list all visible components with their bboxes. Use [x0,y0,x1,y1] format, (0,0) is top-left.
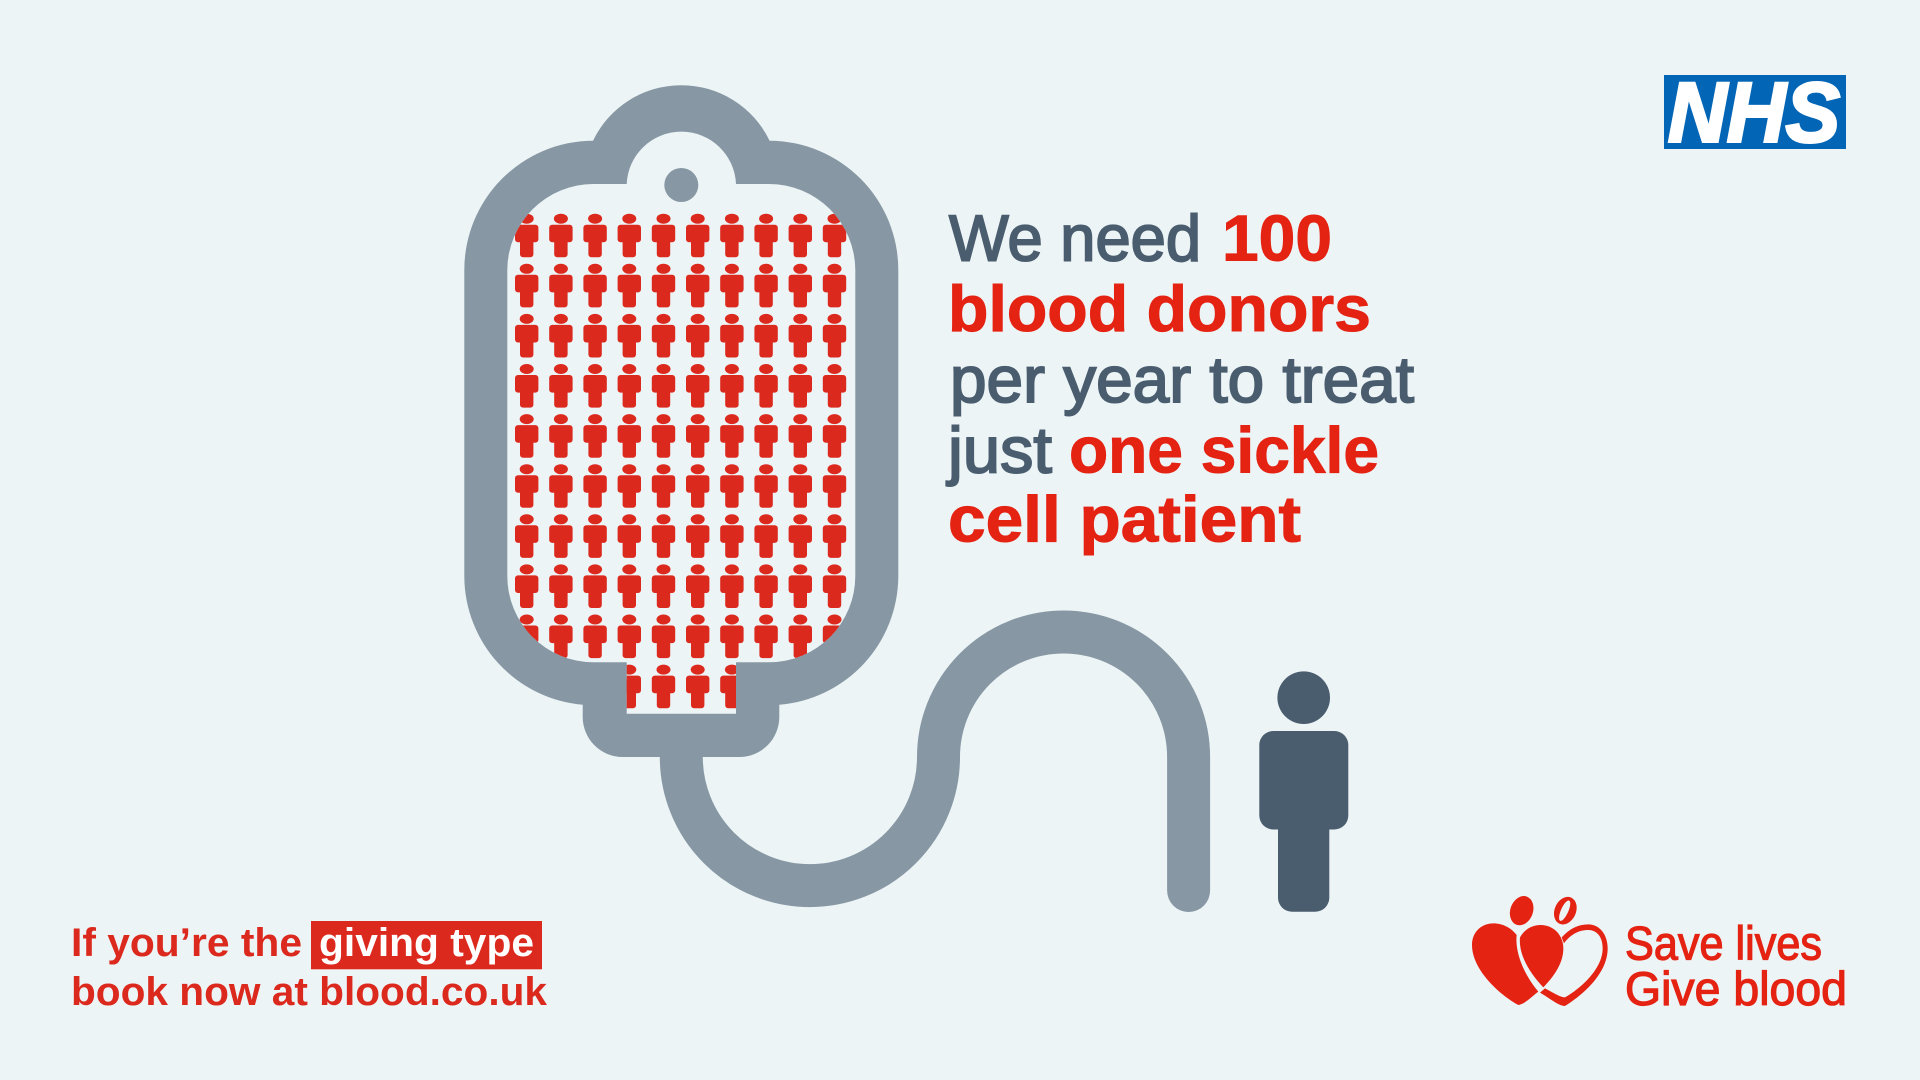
logo: Save lives Give blood [1472,893,1847,1015]
headline text: We need [949,202,1201,275]
blood bag with tube [464,85,1189,890]
headline text: cell patient [948,483,1301,556]
icon: patient figure [1259,671,1348,912]
headline text: just [946,414,1052,487]
pictogram: 100 red donors inside the bag [515,214,846,708]
bag outline [464,85,898,757]
call to action: book now at blood.co.uk [71,970,548,1014]
bag hanging hole [664,168,698,202]
call to action [71,921,548,1014]
call to action: If you’re the [71,921,302,965]
headline text: per year to treat [950,343,1414,416]
logo: NHS: NHS [1668,66,1840,160]
headline text: one sickle [1069,414,1379,487]
icon: hearts [1472,893,1608,1006]
headline text: blood donors [948,272,1371,345]
headline text [946,202,1414,556]
tube [681,632,1189,890]
logo: Save lives Give blood: Save lives [1625,916,1822,969]
headline text: 100 [1222,202,1332,275]
logo: Save lives Give blood: Give blood [1625,962,1847,1015]
call to action: giving type [319,921,534,965]
